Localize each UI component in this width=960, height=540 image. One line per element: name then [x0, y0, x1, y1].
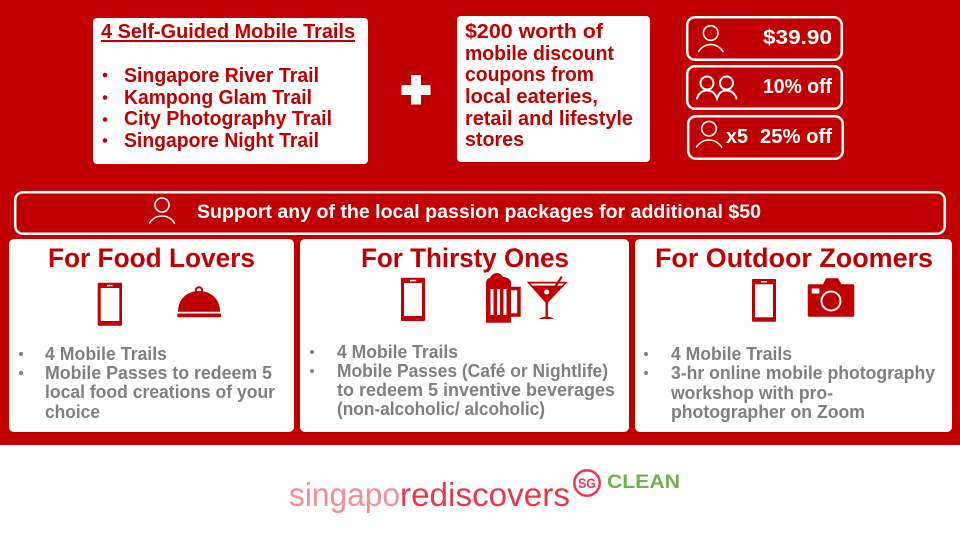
feature list [644, 344, 935, 422]
trail list: Singapore Night Trail [124, 129, 319, 152]
logo: Singapore Rediscovers SG Clean [289, 470, 680, 513]
icon: person [698, 26, 723, 52]
icon: person [696, 121, 722, 147]
logo: Singapore Rediscovers SG Clean: CLEAN [607, 471, 680, 493]
logo: Singapore Rediscovers SG Clean: singapo [289, 476, 400, 513]
icon: two people [697, 76, 736, 98]
price: two people: 10% off [763, 75, 832, 98]
icon: mobile phone [401, 278, 425, 321]
feature list: to redeem 5 inventive beverages [337, 380, 615, 400]
feature list: local food creations of your [45, 382, 275, 402]
price: single person: $39.90 [763, 26, 832, 49]
icon: food cloche [177, 287, 221, 317]
icon: SG circle: SG [578, 475, 596, 491]
panel: for outdoor zoomers [635, 239, 952, 432]
icon: SG circle [574, 470, 600, 496]
price: five people: x5 [726, 125, 748, 148]
icon: camera [808, 278, 854, 317]
feature list [19, 344, 275, 422]
price: two people [687, 66, 842, 109]
trail list: Kampong Glam Trail [124, 86, 312, 109]
panel: discount coupons [457, 16, 650, 162]
icon: mobile phone [98, 283, 122, 326]
feature list: 4 Mobile Trails [671, 344, 792, 364]
banner: support local passion packages [15, 192, 945, 234]
price: single person [687, 17, 842, 60]
panel: for thirsty ones [300, 239, 629, 432]
panel: mobile trails [93, 18, 368, 164]
heading: outdoor zoomers: For Outdoor Zoomers [655, 243, 933, 273]
price: five people [688, 116, 843, 159]
price: five people: 25% off [760, 125, 832, 148]
panel: discount coupons: coupons from [465, 63, 594, 86]
banner: support local passion packages: Support any of the local passion packages for additional $50 [197, 201, 761, 223]
feature list: choice [45, 402, 100, 422]
panel: discount coupons: retail and lifestyle [465, 107, 633, 130]
trail list [103, 64, 332, 152]
heading: mobile trails: 4 Self-Guided Mobile Trails [101, 20, 355, 43]
panel: discount coupons: mobile discount [465, 42, 614, 65]
logo: Singapore Rediscovers SG Clean: rediscovers [400, 476, 570, 513]
heading: food lovers: For Food Lovers [48, 243, 255, 273]
feature list: 3-hr online mobile photography [671, 363, 935, 383]
panel: discount coupons: local eateries, [465, 85, 598, 108]
icon: plus sign [402, 75, 430, 104]
icon: person [150, 198, 174, 223]
icon: beer mug [486, 273, 521, 323]
panel: discount coupons: $200 worth of [465, 20, 603, 43]
feature list: Mobile Passes to redeem 5 [45, 363, 272, 383]
icon: mobile phone [752, 279, 776, 322]
trail list: City Photography Trail [124, 107, 332, 130]
panel: discount coupons: stores [465, 128, 524, 151]
feature list: (non-alcoholic/ alcoholic) [337, 399, 545, 419]
icon: martini glass [527, 277, 568, 319]
heading: thirsty ones: For Thirsty Ones [361, 243, 569, 273]
feature list: photographer on Zoom [671, 402, 865, 422]
feature list: 4 Mobile Trails [45, 344, 167, 364]
feature list [310, 342, 615, 419]
feature list: workshop with pro- [670, 383, 833, 403]
panel: for food lovers [9, 239, 294, 432]
trail list: Singapore River Trail [124, 64, 319, 87]
feature list: 4 Mobile Trails [337, 342, 458, 362]
feature list: Mobile Passes (Café or Nightlife) [337, 361, 608, 381]
